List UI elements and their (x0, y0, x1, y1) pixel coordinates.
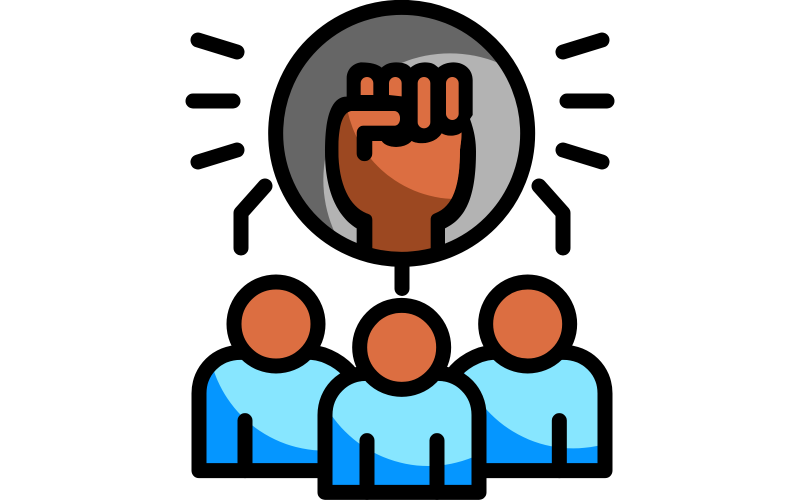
icon: raised fist (325, 62, 476, 252)
fist outline silhouette (325, 62, 476, 252)
arrow: right bracket connector (539, 186, 563, 248)
arrow: centre connector (394, 262, 410, 288)
arrow: left bracket connector (241, 186, 265, 248)
people group (192, 274, 612, 500)
person: right (448, 274, 612, 478)
icon: right emphasis lines (563, 40, 607, 162)
person: left (192, 274, 356, 478)
fingers (361, 77, 459, 128)
circle background (283, 14, 520, 244)
icon: left emphasis lines (193, 40, 237, 162)
person: centre (318, 298, 486, 500)
infographic: raised fist above a group of people (186, 0, 614, 500)
palm and thumb fill (338, 111, 462, 252)
circle ring (276, 7, 528, 259)
